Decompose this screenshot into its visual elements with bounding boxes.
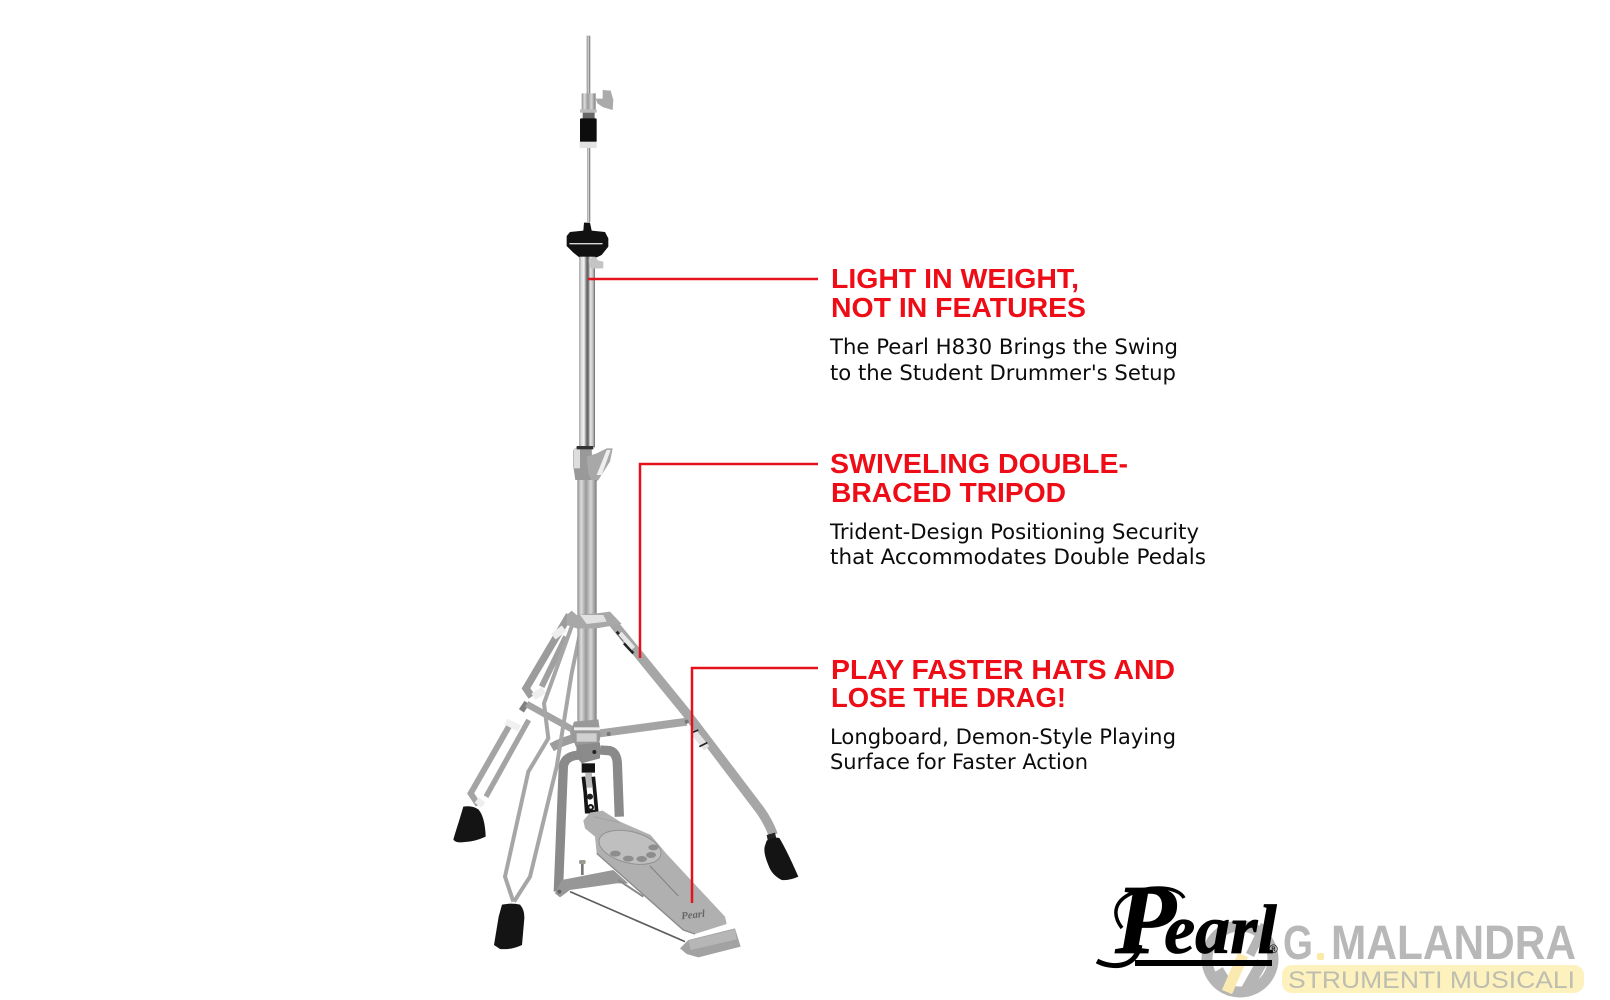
watermark wordmark: G xyxy=(1283,917,1313,970)
middle tripod leg xyxy=(505,620,580,902)
heading xyxy=(831,654,1175,713)
description: The Pearl H830 Brings the Swing xyxy=(829,335,1178,359)
heading: SWIVELING DOUBLE- xyxy=(830,448,1128,479)
description: that Accommodates Double Pedals xyxy=(830,545,1206,569)
drive chain xyxy=(582,763,597,812)
description: Longboard, Demon-Style Playing xyxy=(830,725,1176,749)
heading: LOSE THE DRAG! xyxy=(831,682,1066,713)
heading xyxy=(831,263,1086,323)
watermark tagline: STRUMENTI MUSICALI xyxy=(1288,967,1575,994)
description xyxy=(829,335,1178,385)
callout line: pedal xyxy=(692,668,818,903)
description: to the Student Drummer's Setup xyxy=(830,361,1176,385)
watermark emblem xyxy=(1207,925,1273,994)
feature 3: faster hats xyxy=(830,654,1176,774)
clamp collar xyxy=(570,719,601,748)
callout line: tripod xyxy=(640,464,818,658)
description: Trident-Design Positioning Security xyxy=(829,520,1199,544)
left foot xyxy=(453,806,486,842)
right tripod leg xyxy=(613,623,777,843)
footboard: Pearl xyxy=(681,909,706,922)
middle foot xyxy=(494,904,524,949)
description xyxy=(829,520,1206,569)
upper stand: rod, clutch, top cap and tube xyxy=(567,36,613,500)
heel plate xyxy=(680,928,741,957)
heel link rod xyxy=(570,892,685,942)
cross braces xyxy=(527,704,689,747)
feature 2: tripod xyxy=(829,448,1206,569)
center tube xyxy=(577,500,597,722)
description xyxy=(830,725,1176,774)
callout line: light weight xyxy=(588,278,818,280)
heading: NOT IN FEATURES xyxy=(831,292,1086,323)
hi-hat stand photo illustration xyxy=(453,36,798,957)
right foot xyxy=(764,838,798,880)
yellow dot xyxy=(1317,953,1324,960)
description: Surface for Faster Action xyxy=(830,750,1088,774)
lower stand: tripod legs, brace and pedal xyxy=(453,500,798,957)
heading: BRACED TRIPOD xyxy=(831,477,1066,508)
heading: PLAY FASTER HATS AND xyxy=(831,654,1175,685)
yellow pill xyxy=(1282,965,1584,993)
left tripod leg xyxy=(471,615,569,805)
spider bracket xyxy=(567,611,622,628)
heading xyxy=(830,448,1128,508)
feature 1: light in weight xyxy=(829,263,1178,385)
heading: LIGHT IN WEIGHT, xyxy=(831,263,1079,294)
pedal frame xyxy=(555,750,643,897)
footboard xyxy=(583,811,727,934)
watermark wordmark: MALANDRA xyxy=(1331,917,1576,970)
watermark: G. Malandra Strumenti Musicali xyxy=(1207,917,1584,994)
Pearl logo: Pearl xyxy=(1114,864,1277,975)
Pearl logo: ® xyxy=(1269,942,1278,956)
